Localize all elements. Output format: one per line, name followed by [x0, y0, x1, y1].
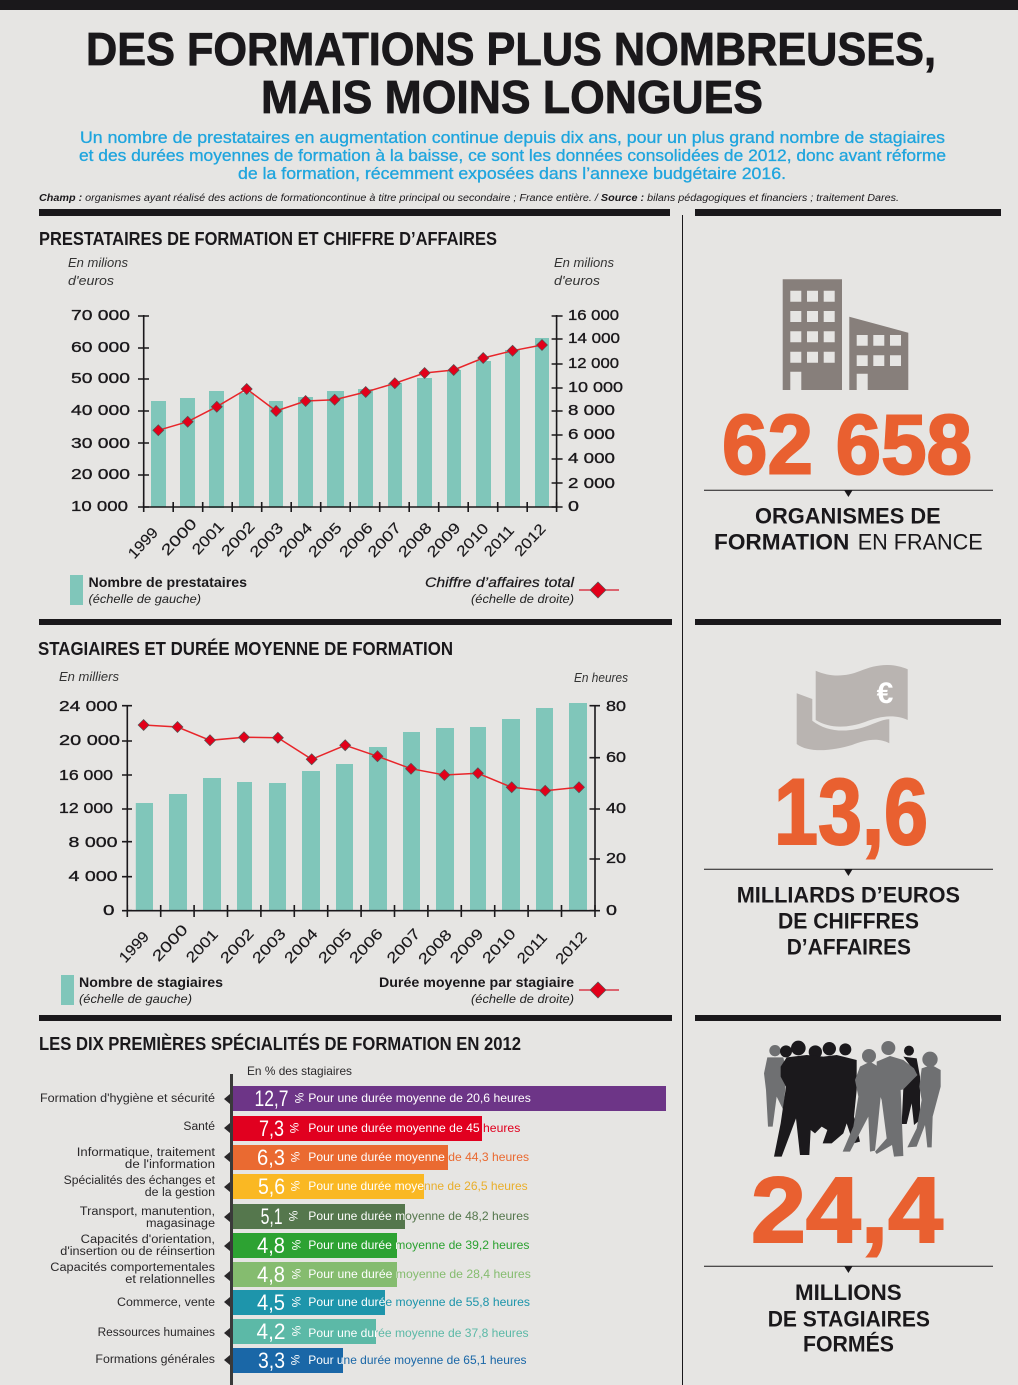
- caption: DE CHIFFRES: [778, 908, 919, 933]
- year labels: 2002: [218, 519, 259, 560]
- row: santé: %: [287, 1123, 301, 1134]
- year labels: 2005: [305, 520, 346, 561]
- panel: spécialités: [39, 1033, 666, 1385]
- row: commerce: 4,5: [257, 1290, 285, 1315]
- bars: nombre de stagiaires: [136, 703, 587, 911]
- subtitle: de la formation, récemment exposées dans l’annexe budgétaire 2016.: [238, 165, 786, 183]
- caption: ORGANISMES DE: [755, 503, 941, 528]
- legend: prestataires: Nombre de prestataires: [88, 575, 247, 590]
- caption: [714, 503, 983, 554]
- left axis labels: [71, 307, 130, 515]
- panel: prestataires chart: [39, 229, 623, 606]
- right axis labels: 14 000: [568, 330, 620, 347]
- year labels: 2005: [315, 926, 356, 967]
- row: transport: magasinage: [146, 1218, 215, 1230]
- caption: MILLIARDS D’EUROS: [737, 882, 960, 907]
- row: commerce: %: [289, 1297, 303, 1308]
- row: hygiène et sécurité: Formation d'hygiène et sécurité: [40, 1093, 215, 1105]
- caption: FORMÉS: [803, 1332, 894, 1357]
- row: échanges et gestion: 5,6: [258, 1174, 285, 1199]
- left axis labels: 8 000: [68, 834, 118, 851]
- row: orientation: %: [289, 1240, 303, 1251]
- left axis labels: 0: [103, 902, 114, 919]
- right axis labels: 16 000: [568, 307, 619, 324]
- year labels: 2003: [249, 926, 290, 967]
- left axis labels: 20 000: [71, 466, 130, 483]
- source note: Champ : organismes ayant réalisé des actions de formationcontinue à titre principal ou secondaire ; France entière. / Source : bilans pédagogiques et financiers ; traitement Dares.: [39, 193, 899, 204]
- left axis labels: 4 000: [68, 868, 118, 885]
- left axis labels: 30 000: [71, 435, 130, 452]
- year labels: 2006: [346, 926, 387, 967]
- right axis labels: 10 000: [568, 379, 623, 396]
- axes: [122, 706, 600, 917]
- icon: group of people: [764, 1041, 941, 1157]
- row: orientation: 4,8: [257, 1233, 285, 1258]
- row: transport: Pour une durée moyenne de 48,2 heures: [308, 1209, 529, 1223]
- divider pointer: [704, 489, 993, 491]
- row: transport: 5,1: [261, 1204, 283, 1229]
- panel: organismes: [704, 279, 993, 554]
- figure: 62 658: 62 658: [722, 398, 972, 492]
- heading: PRESTATAIRES DE FORMATION ET CHIFFRE D’AFFAIRES: [39, 229, 497, 249]
- year labels: 1999: [125, 524, 162, 562]
- year labels: 2012: [511, 521, 550, 560]
- legend: chiffre d'affaires: Chiffre d’affaires total: [425, 575, 575, 590]
- right axis labels: [606, 698, 626, 919]
- pointers: [224, 1094, 230, 1365]
- row: orientation: d'insertion ou de réinsertion: [60, 1246, 215, 1258]
- year labels: 1999: [116, 928, 153, 966]
- left axis unit: [68, 255, 128, 288]
- row: santé: Pour une durée moyenne de 45 heures: [308, 1121, 520, 1135]
- row: commerce: [117, 1290, 530, 1315]
- legend: durée moyenne: [379, 975, 619, 1006]
- row: hygiène et sécurité: 12,7: [254, 1086, 288, 1111]
- row: transport: [80, 1204, 529, 1230]
- year labels: 2007: [365, 520, 405, 561]
- row: orientation: Pour une durée moyenne de 39,2 heures: [308, 1238, 530, 1252]
- legend: stagiaires: [61, 975, 223, 1006]
- row: santé: [183, 1116, 520, 1141]
- year labels: 2011: [514, 929, 551, 967]
- subtitle: Un nombre de prestataires en augmentation continue depuis dix ans, pour un plus grand nombre de stagiaires: [80, 129, 945, 147]
- row: commerce: Pour une durée moyenne de 55,8 heures: [308, 1295, 530, 1309]
- year labels: 2000: [149, 921, 192, 965]
- left axis labels: 12 000: [59, 800, 113, 817]
- row: échanges et gestion: %: [288, 1181, 302, 1192]
- year labels: 2012: [552, 929, 591, 968]
- year labels: 2009: [447, 926, 487, 967]
- caption: D’AFFAIRES: [787, 934, 911, 959]
- year labels: 2006: [336, 520, 377, 561]
- panel: stagiaires chart: [38, 638, 628, 1006]
- row: ressources humaines: Pour une durée moyenne de 37,8 heures: [308, 1326, 529, 1340]
- right axis labels: 40: [606, 800, 626, 817]
- row: échanges et gestion: de la gestion: [145, 1187, 215, 1199]
- row: échanges et gestion: Pour une durée moyenne de 26,5 heures: [308, 1179, 528, 1193]
- year labels: 2003: [247, 520, 287, 561]
- year labels: 2010: [453, 520, 492, 560]
- line: durée moyenne: [138, 720, 584, 796]
- line: chiffre d'affaires total: [153, 340, 548, 436]
- bars: nombre de prestataires: [151, 338, 549, 508]
- divider pointer: [704, 1265, 993, 1267]
- legend: durée moyenne: (échelle de droite): [471, 992, 574, 1006]
- right axis unit: [554, 255, 614, 288]
- year labels: 2000: [158, 515, 201, 559]
- left axis unit: En milliers: [59, 669, 119, 684]
- panel: chiffre d'affaires: [704, 665, 993, 959]
- row: santé: Santé: [183, 1121, 215, 1133]
- row: formations générales: [95, 1348, 527, 1373]
- row: comportementales: %: [289, 1269, 303, 1280]
- year labels: 2011: [481, 522, 518, 560]
- row: informatique: Informatique, traitement: [77, 1147, 216, 1159]
- legend: chiffre d'affaires: [425, 575, 619, 606]
- year labels: 2008: [415, 927, 456, 968]
- title: DES FORMATIONS PLUS NOMBREUSES,: [86, 23, 936, 75]
- left axis labels: 24 000: [59, 698, 118, 715]
- subtitle: et des durées moyennes de formation à la baisse, ce sont les données consolidées de 2012, donc avant réforme: [79, 147, 946, 165]
- right axis labels: 0: [568, 498, 579, 515]
- right axis labels: 80: [606, 698, 626, 715]
- year labels: 2002: [217, 926, 258, 967]
- left axis labels: 16 000: [59, 767, 113, 784]
- row: orientation: Capacités d'orientation,: [81, 1234, 215, 1246]
- row: orientation: [60, 1233, 530, 1258]
- legend: stagiaires: (échelle de gauche): [79, 992, 192, 1006]
- heading: STAGIAIRES ET DURÉE MOYENNE DE FORMATION: [38, 638, 453, 659]
- year labels: 2007: [384, 926, 424, 967]
- axes: [138, 315, 563, 512]
- row: formations générales: Formations générales: [95, 1354, 215, 1366]
- right axis unit: En heures: [574, 670, 628, 685]
- left axis unit: d'euros: [68, 273, 115, 288]
- right axis labels: 2 000: [568, 475, 615, 492]
- row: ressources humaines: Ressources humaines: [98, 1327, 215, 1339]
- row: informatique: Pour une durée moyenne de 44,3 heures: [308, 1150, 529, 1164]
- right axis labels: 12 000: [568, 355, 619, 372]
- right axis unit: En milions: [554, 255, 614, 270]
- row: informatique: [77, 1145, 529, 1171]
- legend: chiffre d'affaires: (échelle de droite): [471, 592, 574, 606]
- figure: 13,6: 13,6: [774, 759, 928, 864]
- right axis labels: 0: [606, 902, 617, 919]
- figure: 24,4: 24,4: [751, 1158, 943, 1262]
- right axis labels: 20: [606, 850, 626, 867]
- row: comportementales: 4,8: [257, 1262, 285, 1287]
- left axis labels: 20 000: [59, 732, 120, 749]
- row: comportementales: et relationnelles: [125, 1274, 215, 1286]
- icon: banknotes: €: [877, 677, 894, 710]
- legend: prestataires: (échelle de gauche): [88, 592, 201, 606]
- year labels: 2008: [395, 520, 436, 561]
- caption: [768, 1280, 930, 1357]
- left axis unit: En milions: [68, 255, 128, 270]
- right axis labels: 6 000: [568, 426, 615, 443]
- right axis unit: d'euros: [554, 273, 601, 288]
- right axis labels: 4 000: [568, 450, 615, 467]
- caption: EN FRANCE: [858, 529, 983, 554]
- row: transport: %: [286, 1211, 300, 1222]
- row: comportementales: Pour une durée moyenne de 28,4 heures: [308, 1267, 531, 1281]
- year labels: 2009: [424, 520, 464, 561]
- title: [86, 23, 936, 123]
- right axis labels: 8 000: [568, 402, 615, 419]
- left axis labels: 50 000: [71, 370, 130, 387]
- row: formations générales: 3,3: [258, 1348, 285, 1373]
- year labels: [116, 921, 591, 968]
- row: comportementales: [50, 1262, 531, 1287]
- caption: DE STAGIAIRES: [768, 1307, 930, 1332]
- row: échanges et gestion: Spécialités des échanges et: [64, 1175, 216, 1187]
- icon: buildings: [783, 279, 908, 390]
- row: hygiène et sécurité: Pour une durée moyenne de 20,6 heures: [308, 1091, 531, 1105]
- right axis labels: 60: [606, 749, 626, 766]
- row: hygiène et sécurité: [40, 1086, 666, 1111]
- left axis labels: 60 000: [71, 339, 130, 356]
- row: hygiène et sécurité: %: [292, 1093, 306, 1104]
- row: santé: 7,3: [259, 1116, 284, 1141]
- panel: stagiaires formés: [704, 1041, 993, 1357]
- row: ressources humaines: %: [289, 1326, 303, 1337]
- row: ressources humaines: 4,2: [256, 1319, 286, 1344]
- caption: MILLIONS: [795, 1280, 902, 1305]
- heading: LES DIX PREMIÈRES SPÉCIALITÉS DE FORMATION EN 2012: [39, 1033, 521, 1054]
- legend: prestataires: [70, 575, 247, 606]
- legend: stagiaires: Nombre de stagiaires: [79, 975, 223, 990]
- left axis labels: 70 000: [71, 307, 130, 324]
- left axis labels: 10 000: [71, 498, 128, 515]
- row: transport: Transport, manutention,: [80, 1206, 215, 1218]
- row: informatique: 6,3: [257, 1145, 285, 1170]
- caption: [737, 882, 960, 959]
- unit: En % des stagiaires: [247, 1064, 352, 1078]
- row: échanges et gestion: [64, 1174, 528, 1199]
- icon: banknotes: [797, 665, 908, 750]
- subtitle: [79, 129, 946, 183]
- left axis labels: [59, 698, 120, 919]
- year labels: 2001: [189, 518, 228, 558]
- year labels: 2004: [281, 926, 322, 967]
- left axis labels: 40 000: [71, 402, 130, 419]
- year labels: 2001: [183, 926, 222, 966]
- title: MAIS MOINS LONGUES: [261, 71, 763, 123]
- row: formations générales: %: [288, 1355, 302, 1366]
- year labels: 2004: [276, 520, 316, 561]
- right axis labels: [568, 307, 623, 515]
- row: formations générales: Pour une durée moyenne de 65,1 heures: [308, 1353, 526, 1367]
- caption: FORMATION: [714, 529, 849, 554]
- legend: durée moyenne: Durée moyenne par stagiaire: [379, 975, 575, 990]
- vertical axis: [230, 1074, 233, 1385]
- row: ressources humaines: [98, 1319, 529, 1344]
- year labels: 2010: [479, 926, 520, 967]
- year labels: [125, 515, 550, 562]
- row: informatique: %: [288, 1152, 302, 1163]
- divider pointer: [704, 868, 993, 870]
- row: informatique: de l'information: [125, 1159, 215, 1171]
- row: comportementales: Capacités comportementales: [50, 1262, 215, 1274]
- row: commerce: Commerce, vente: [117, 1297, 215, 1309]
